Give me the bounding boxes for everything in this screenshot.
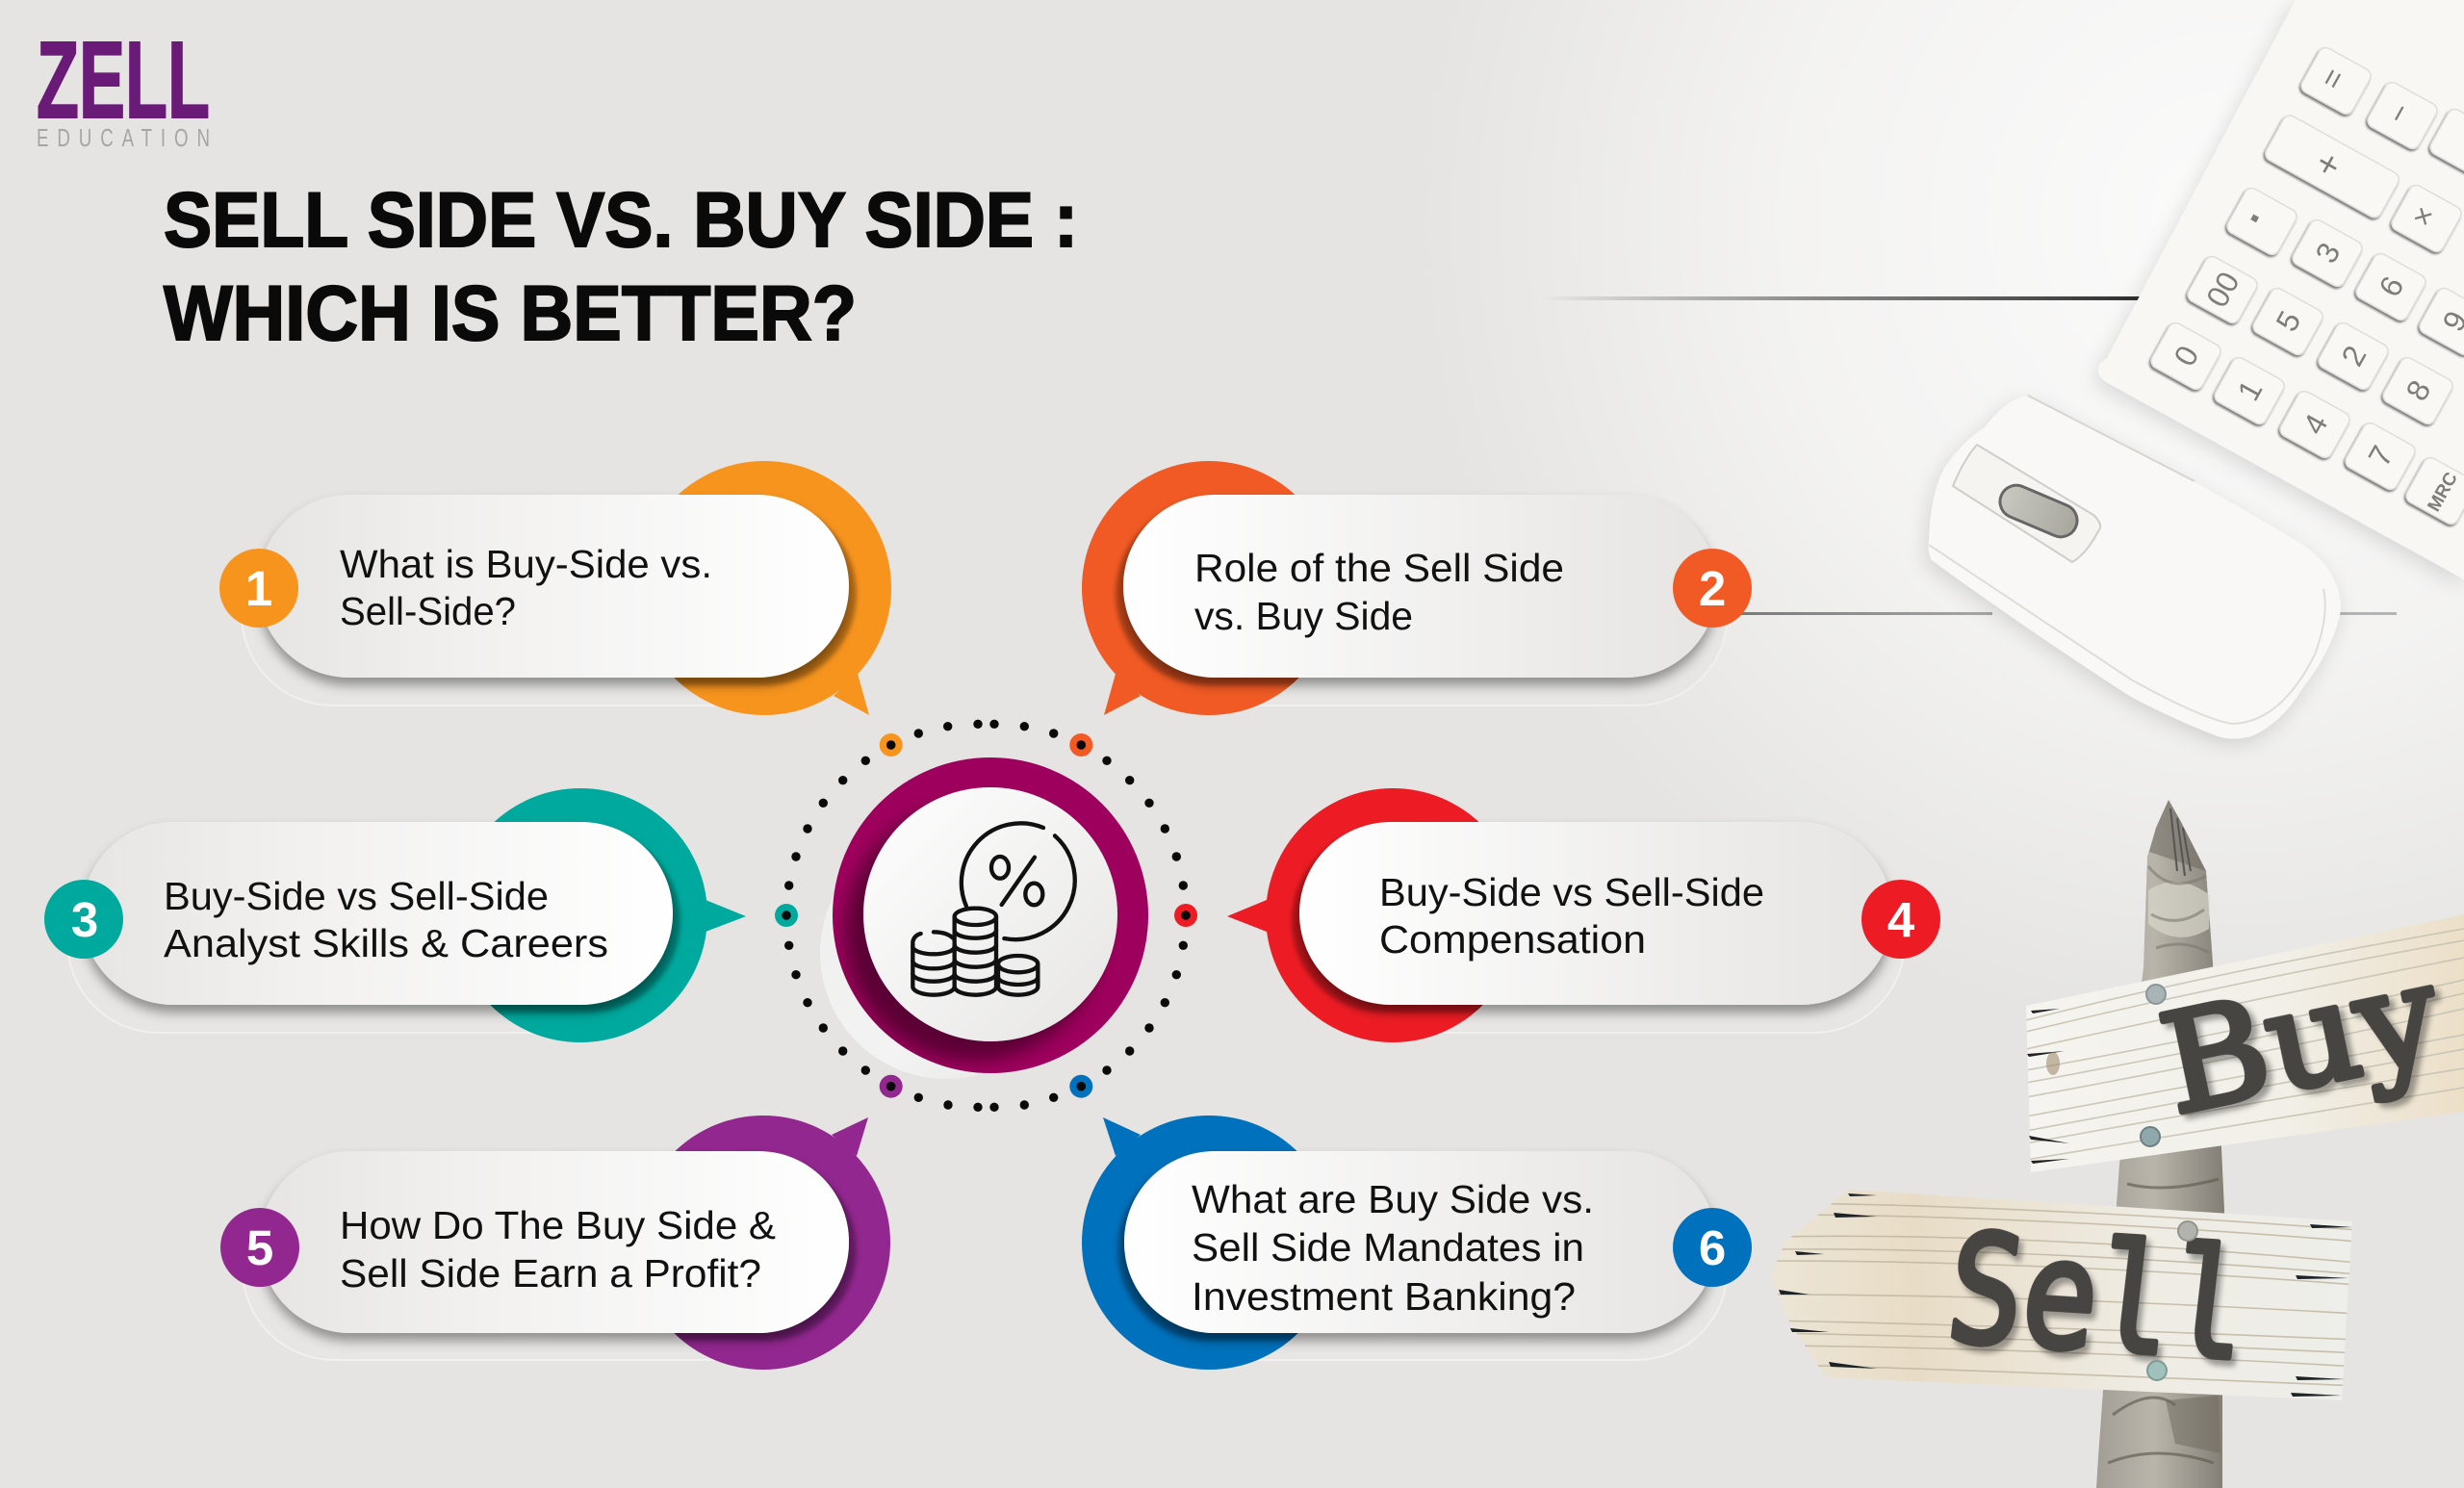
calculator key labels: − xyxy=(2379,97,2419,130)
text 4 xyxy=(1379,870,1764,962)
text 5 xyxy=(340,1203,776,1296)
calculator xyxy=(2098,0,2464,579)
calculator key labels: 4 xyxy=(2296,408,2334,440)
colored connector nodes xyxy=(775,733,1197,1098)
text 5: Sell Side Earn a Profit? xyxy=(340,1251,761,1296)
speech bubble 3 xyxy=(453,788,746,1042)
panel: card 4 xyxy=(1227,788,1940,1042)
calculator key labels: × xyxy=(2403,200,2443,233)
number 2: 2 xyxy=(1699,561,1726,616)
icon: percent circle and coin stacks xyxy=(912,823,1075,995)
calculator key labels: 8 xyxy=(2399,374,2437,406)
number 4 xyxy=(1861,880,1940,959)
calculator key labels xyxy=(2167,63,2464,515)
calculator key labels: 5 xyxy=(2269,305,2307,337)
calculator key labels: + xyxy=(2306,145,2351,184)
calculator key labels: 7 xyxy=(2361,440,2400,472)
panel: card 6 xyxy=(1082,1116,1752,1370)
text 6: Sell Side Mandates in xyxy=(1192,1225,1584,1270)
number 3: 3 xyxy=(71,892,98,947)
speech bubble 4 xyxy=(1227,788,1520,1042)
panel: card 3 xyxy=(44,788,746,1042)
panel: card 1 xyxy=(219,461,891,715)
computer mouse xyxy=(1928,396,2341,739)
logo: Zell Education: ZELL xyxy=(37,19,210,141)
text 1: What is Buy-Side vs. xyxy=(340,542,712,586)
text 6: Investment Banking? xyxy=(1192,1274,1576,1319)
text 2 xyxy=(1194,546,1564,638)
text 4: Compensation xyxy=(1379,917,1646,962)
number 2 xyxy=(1673,549,1752,628)
number 5: 5 xyxy=(246,1220,273,1275)
calculator key labels: 1 xyxy=(2230,374,2269,406)
text 1: Sell-Side? xyxy=(340,589,516,633)
speech bubble 5 xyxy=(636,1116,890,1370)
sign text: Buy: Buy xyxy=(2148,934,2452,1145)
dotted ring xyxy=(784,720,1188,1112)
post xyxy=(2096,800,2224,1488)
pill 6 xyxy=(1124,1151,1716,1333)
speech bubble 2 xyxy=(1082,461,1336,715)
pill 4 xyxy=(1299,822,1892,1005)
center hub xyxy=(820,757,1148,1079)
number 1: 1 xyxy=(245,561,272,616)
text 6: What are Buy Side vs. xyxy=(1192,1177,1594,1221)
board: Buy xyxy=(2026,914,2464,1172)
text 4: Buy-Side vs Sell-Side xyxy=(1379,870,1764,914)
text 2: Role of the Sell Side xyxy=(1194,546,1564,590)
calculator key labels: 0 xyxy=(2167,340,2205,372)
number 6 xyxy=(1673,1208,1752,1287)
text 3: Buy-Side vs Sell-Side xyxy=(164,874,549,918)
pill 1 xyxy=(258,495,849,678)
text 6 xyxy=(1192,1177,1594,1319)
signpost xyxy=(1770,800,2464,1488)
speech bubble 6 xyxy=(1082,1116,1336,1370)
number 5 xyxy=(220,1208,299,1287)
pill 5 xyxy=(260,1151,849,1333)
calculator key labels: 2 xyxy=(2334,340,2373,372)
pill 3 xyxy=(82,822,673,1005)
logo: Zell Education xyxy=(37,19,210,152)
text 1 xyxy=(340,542,712,633)
calculator keys xyxy=(2148,45,2464,526)
calculator key labels: MRC xyxy=(2425,469,2462,515)
panel: card 2 xyxy=(1082,461,1752,715)
number 1 xyxy=(219,549,298,628)
title xyxy=(164,177,1078,357)
calculator key labels: 3 xyxy=(2308,237,2347,269)
calculator key labels: = xyxy=(2313,63,2352,95)
pill 2 xyxy=(1123,495,1717,678)
calculator key labels: 00 xyxy=(2199,266,2246,313)
number 3 xyxy=(44,880,123,959)
speech bubble 1 xyxy=(637,461,891,715)
number 6: 6 xyxy=(1699,1220,1726,1275)
sign text: Sell: Sell xyxy=(1939,1201,2257,1394)
title: WHICH IS BETTER? xyxy=(164,270,857,357)
panel: card 5 xyxy=(220,1116,890,1370)
text 5: How Do The Buy Side & xyxy=(340,1203,776,1247)
title: SELL SIDE VS. BUY SIDE : xyxy=(164,177,1078,264)
calculator key labels: 6 xyxy=(2372,270,2410,302)
calculator key labels: · xyxy=(2231,200,2279,235)
number 4: 4 xyxy=(1887,892,1915,947)
text 3 xyxy=(164,874,608,965)
text 2: vs. Buy Side xyxy=(1194,594,1413,638)
text 3: Analyst Skills & Careers xyxy=(164,921,608,965)
desk surface xyxy=(1348,0,2464,1097)
board: Sell xyxy=(1770,1190,2358,1400)
logo: Zell Education: EDUCATION xyxy=(37,123,210,152)
